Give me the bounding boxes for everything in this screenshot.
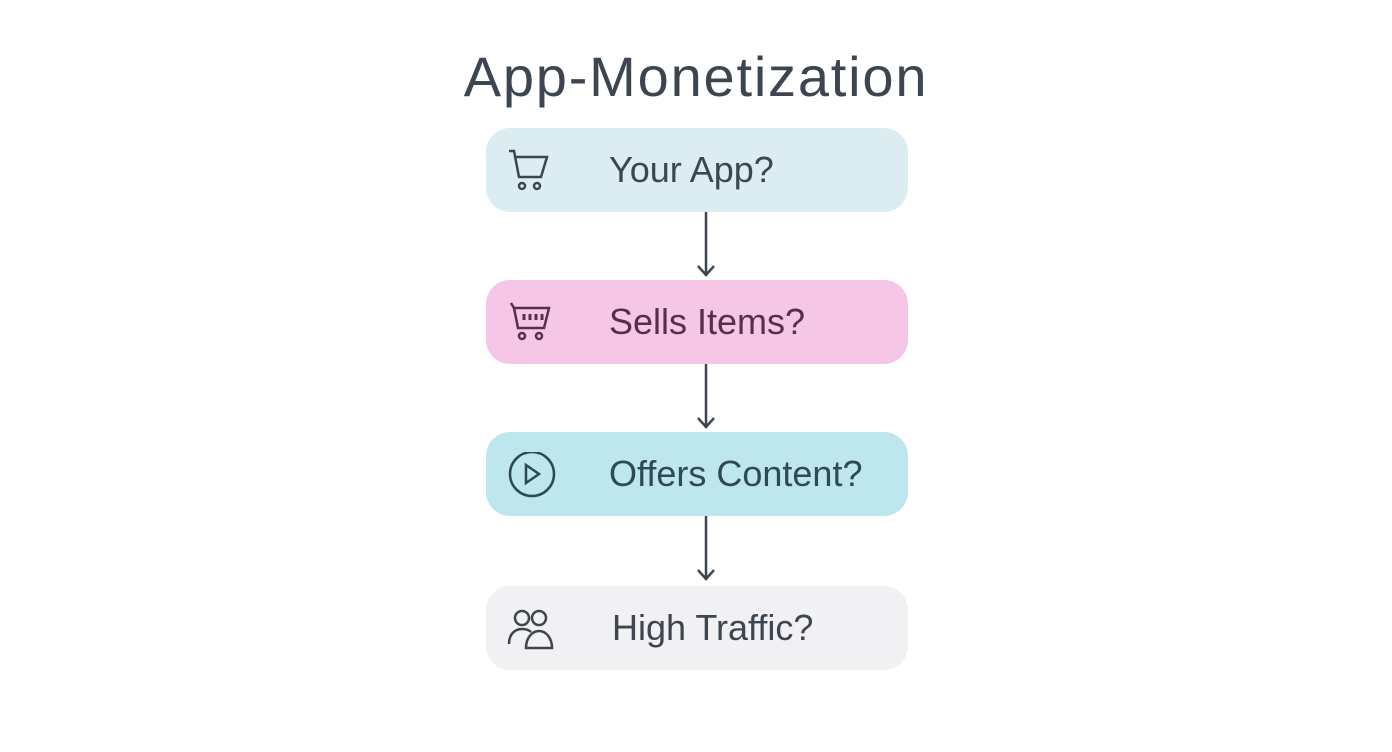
icon: users: [508, 610, 554, 650]
icon: cart: [509, 150, 549, 190]
box: high traffic: [486, 586, 908, 670]
box: your app: Your App?: [609, 149, 774, 190]
icon: basket cart: [510, 302, 551, 340]
box: offers content: [486, 432, 908, 516]
arrow 1: [697, 212, 715, 277]
icon: play: [508, 452, 556, 498]
arrow 3: [697, 516, 715, 581]
box: sells items: Sells Items?: [609, 301, 805, 342]
box: your app: [486, 128, 908, 212]
box: high traffic: High Traffic?: [612, 607, 813, 648]
box: offers content: Offers Content?: [609, 453, 862, 494]
title: App-Monetization: [464, 45, 928, 108]
arrow 2: [697, 364, 715, 429]
box: sells items: [486, 280, 908, 364]
